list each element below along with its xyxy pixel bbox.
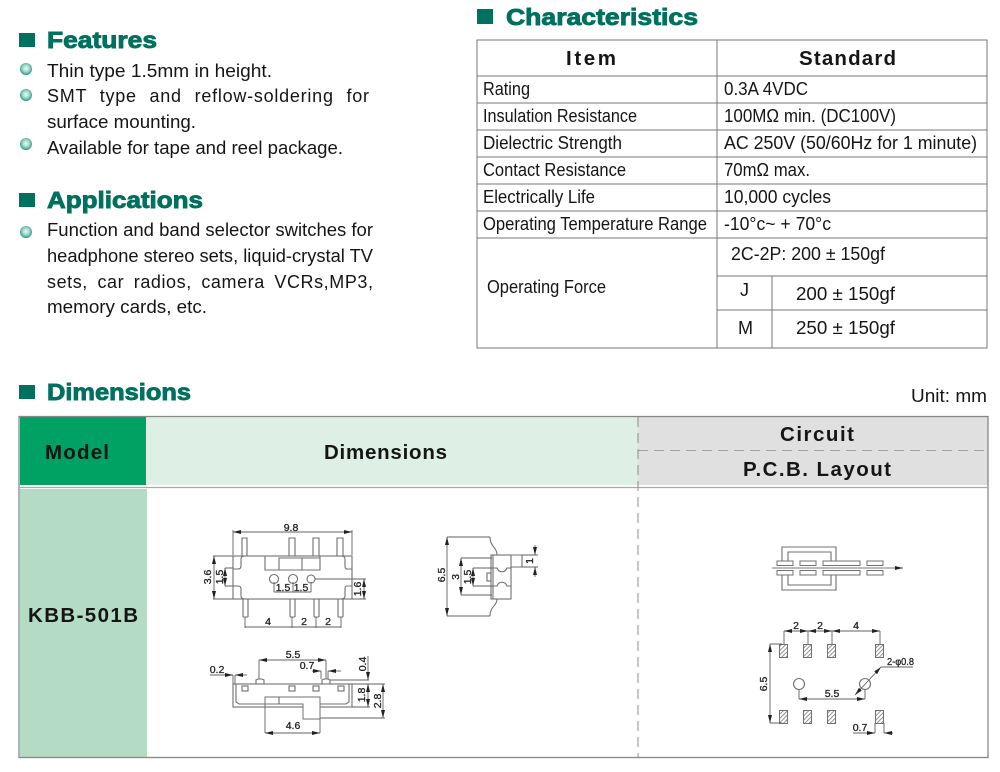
drawing: pcb layout: 5.5 xyxy=(825,688,839,700)
header: circuit and pcb layout: Circuit xyxy=(780,423,854,446)
drawing: pcb layout: 2 xyxy=(793,620,799,632)
drawing: top view: 1.6 xyxy=(352,582,364,596)
feature list xyxy=(20,61,369,158)
drawing: front view: 0.4 xyxy=(357,657,369,671)
characteristics table: Contact Resistance xyxy=(483,160,626,180)
characteristics table: Operating Temperature Range xyxy=(483,214,707,234)
panel: applications xyxy=(19,187,373,317)
drawing: side view: 1 xyxy=(524,558,536,564)
characteristics table: 100MΩ min. (DC100V) xyxy=(724,106,896,126)
characteristics table: -10°c~ + 70°c xyxy=(724,214,831,234)
drawing: front view: 5.5 xyxy=(286,649,300,661)
panel: characteristics xyxy=(477,4,987,348)
drawing: top view: 3.6 xyxy=(202,570,214,584)
drawing: front view xyxy=(210,649,385,733)
characteristics table: Dielectric Strength xyxy=(483,133,622,153)
drawing: side view: 1.5 xyxy=(462,570,474,584)
characteristics table: 250 ± 150gf xyxy=(796,318,896,338)
drawing: front view: 2.8 xyxy=(372,694,384,708)
heading: features: Features xyxy=(47,27,157,53)
application list: Function and band selector switches for xyxy=(47,220,373,240)
panel: dimensions table xyxy=(19,416,988,758)
heading: dimensions: Dimensions xyxy=(47,379,191,405)
heading: characteristics: Characteristics xyxy=(506,4,698,30)
drawing: front view: 1.8 xyxy=(356,688,368,702)
characteristics table: 70mΩ max. xyxy=(724,160,810,180)
feature list: Available for tape and reel package. xyxy=(47,138,343,158)
header: dimensions: Dimensions xyxy=(324,441,447,464)
drawing: side view: 6.5 xyxy=(436,568,448,582)
application list xyxy=(20,220,373,317)
characteristics table: 200 ± 150gf xyxy=(796,284,896,304)
panel: features xyxy=(19,27,369,158)
drawing: pcb layout: 6.5 xyxy=(758,677,770,691)
drawing: top view: 1.5 xyxy=(214,570,226,584)
drawing: pcb layout: 4 xyxy=(853,620,859,632)
characteristics table: M xyxy=(738,318,753,338)
characteristics table: J xyxy=(740,280,749,300)
header: model: Model xyxy=(45,441,109,464)
drawing: front view: 0.7 xyxy=(300,660,314,672)
drawing: circuit diagram xyxy=(772,547,903,590)
characteristics table: 10,000 cycles xyxy=(724,187,831,207)
header: circuit and pcb layout: P.C.B. Layout xyxy=(743,458,891,481)
application list: headphone stereo sets, liquid-crystal TV xyxy=(47,246,373,266)
drawing: top view: 4 xyxy=(265,616,271,628)
drawing: top view xyxy=(202,522,366,628)
drawing: side view xyxy=(436,537,538,616)
application list: memory cards, etc. xyxy=(47,297,207,317)
characteristics table: Rating xyxy=(483,79,530,99)
characteristics table: Operating Force xyxy=(487,277,606,297)
characteristics table: 0.3A 4VDC xyxy=(724,79,808,99)
drawing: top view: 2 xyxy=(325,616,331,628)
characteristics table: Standard xyxy=(799,47,896,70)
header: circuit and pcb layout xyxy=(638,417,988,485)
model cell xyxy=(20,489,147,757)
drawing: pcb layout xyxy=(758,620,914,734)
drawing: pcb layout: 2 xyxy=(817,620,823,632)
drawing: pcb layout: 0.7 xyxy=(853,722,867,734)
drawing: front view: 4.6 xyxy=(286,720,300,732)
drawing: side view: 3 xyxy=(450,574,462,580)
header: dimensions xyxy=(146,417,638,485)
characteristics table: Electrically Life xyxy=(483,187,595,207)
model cell: KBB-501B xyxy=(28,604,138,627)
heading: applications: Applications xyxy=(47,187,203,213)
drawing: top view: 1.5 xyxy=(276,582,290,594)
drawing: top view: 9.8 xyxy=(284,522,298,534)
characteristics table xyxy=(477,40,987,348)
drawing: front view: 0.2 xyxy=(210,664,224,676)
feature list: surface mounting. xyxy=(47,112,196,132)
header: model xyxy=(20,417,146,485)
drawing: top view: 1.5 xyxy=(294,582,308,594)
application list: sets, car radios, camera VCRs,MP3, xyxy=(47,272,373,292)
drawing: top view: 2 xyxy=(301,616,307,628)
feature list: SMT type and reflow-soldering for xyxy=(47,86,369,106)
drawing: pcb layout: 2-φ0.8 xyxy=(887,656,914,668)
unit note: Unit: mm xyxy=(911,386,987,406)
characteristics table: Insulation Resistance xyxy=(483,106,637,126)
characteristics table: 2C-2P: 200 ± 150gf xyxy=(731,244,886,264)
characteristics table: AC 250V (50/60Hz for 1 minute) xyxy=(724,133,977,153)
characteristics table: Item xyxy=(566,47,616,70)
feature list: Thin type 1.5mm in height. xyxy=(47,61,272,81)
